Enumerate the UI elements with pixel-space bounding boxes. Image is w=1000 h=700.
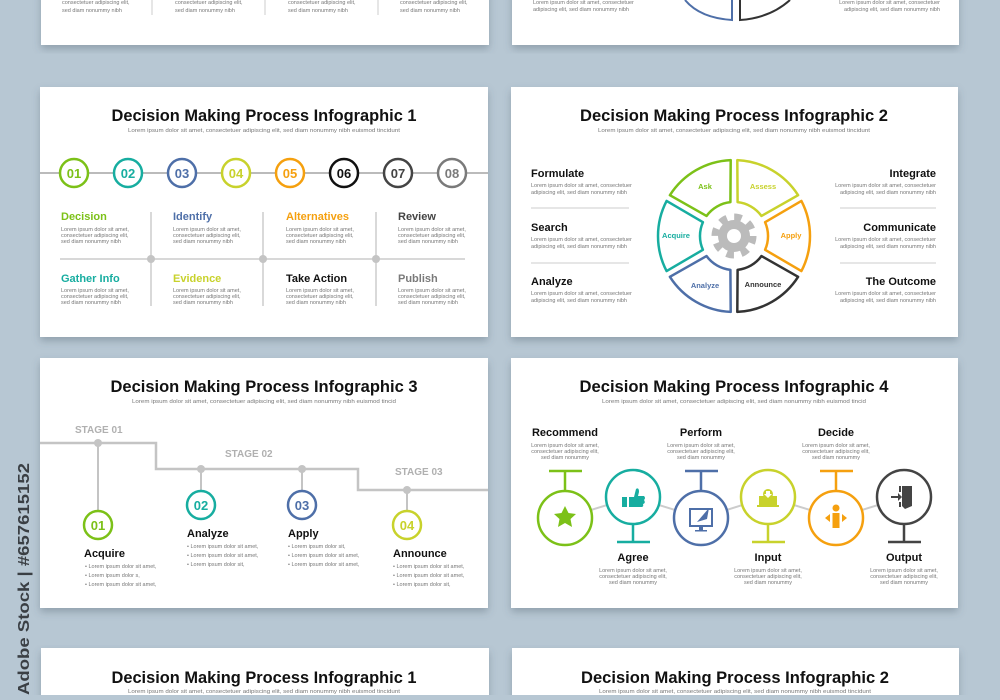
watermark: side credit: Adobe Stock | #657615152 — [16, 463, 33, 695]
card: top-right partial: Lorem ipsum dolor sit amet, consectetuer — [533, 0, 634, 6]
step texts: Recommend — [532, 427, 598, 439]
stage texts: Announce — [393, 548, 447, 560]
left items: Lorem ipsum dolor sit amet, consectetuer — [531, 183, 632, 189]
right items: adipiscing elit, sed diam nonummy nibh — [840, 298, 936, 304]
left items: Analyze — [531, 276, 573, 288]
step texts: Lorem ipsum dolor sit amet, — [286, 227, 354, 233]
stage texts: Acquire — [84, 548, 125, 560]
step texts: consectetuer adipiscing elit, — [802, 449, 870, 455]
step texts: consectetuer adipiscing elit, — [531, 449, 599, 455]
numbered circles: 05 — [283, 166, 297, 181]
step texts: consectetuer adipiscing elit, — [398, 233, 466, 239]
panel: infographic 2: Lorem ipsum dolor sit amet, consectetuer adipiscing elit, sed diam nonummy nibh euismod tincidunt — [598, 128, 871, 134]
step texts: Take Action — [286, 273, 347, 285]
step texts: Lorem ipsum dolor sit amet, — [398, 227, 466, 233]
left items: Search — [531, 222, 568, 234]
step texts: sed diam nonummy nibh — [173, 239, 233, 245]
card: top-left partial: consectetuer adipiscing elit, — [62, 0, 130, 6]
step texts: Perform — [680, 427, 722, 439]
step texts: consectetuer adipiscing elit, — [286, 233, 354, 239]
stage texts: • Lorem ipsum dolor sit amet, — [393, 573, 465, 579]
card: bottom-left partial — [41, 648, 489, 700]
step texts: consectetuer adipiscing elit, — [599, 574, 667, 580]
step texts: Lorem ipsum dolor sit amet, — [286, 288, 354, 294]
step texts: consectetuer adipiscing elit, — [173, 294, 241, 300]
left items — [531, 168, 632, 304]
numbered circles: 07 — [391, 166, 405, 181]
numbered circles: 02 — [121, 166, 135, 181]
step texts: Input — [755, 552, 782, 564]
panel: infographic 3 — [40, 358, 488, 608]
stage texts: • Lorem ipsum dolor sit, — [393, 582, 451, 588]
step texts: Evidence — [173, 273, 221, 285]
step texts: consectetuer adipiscing elit, — [173, 233, 241, 239]
right items: adipiscing elit, sed diam nonummy nibh — [840, 244, 936, 250]
step texts: Lorem ipsum dolor sit amet, — [667, 443, 735, 449]
icon: star — [554, 506, 576, 527]
step texts: sed diam nonummy — [812, 455, 860, 461]
step texts: Gather Info — [61, 273, 120, 285]
card: top-left partial: consectetuer adipiscing elit, — [175, 0, 243, 6]
title 3: Decision Making Process Infographic 3 — [110, 377, 418, 396]
step texts: Lorem ipsum dolor sit amet, — [61, 227, 129, 233]
wheel diagram: Ask — [698, 182, 713, 191]
step texts — [531, 427, 938, 586]
step texts: sed diam nonummy nibh — [286, 239, 346, 245]
step texts: sed diam nonummy — [880, 580, 928, 586]
stage texts: Apply — [288, 528, 319, 540]
wheel diagram: Analyze — [691, 281, 719, 290]
numbered circles: 04 — [229, 166, 244, 181]
step texts: Lorem ipsum dolor sit amet, — [398, 288, 466, 294]
step texts: Decision — [61, 211, 107, 223]
left items: adipiscing elit, sed diam nonummy nibh — [531, 190, 627, 196]
right items: Communicate — [863, 222, 936, 234]
step texts: sed diam nonummy — [677, 455, 725, 461]
panel: infographic 2 — [511, 87, 958, 337]
step texts: Lorem ipsum dolor sit amet, — [802, 443, 870, 449]
stage texts: • Lorem ipsum dolor sit, — [288, 544, 346, 550]
stage texts: • Lorem ipsum dolor sit amet, — [85, 582, 157, 588]
step texts: sed diam nonummy — [744, 580, 792, 586]
step texts: sed diam nonummy nibh — [398, 239, 458, 245]
card: top-right partial: adipiscing elit, sed diam nonummy nibh — [533, 7, 629, 13]
icon: person arrows — [825, 504, 847, 528]
stepped path — [40, 443, 488, 490]
step texts: consectetuer adipiscing elit, — [61, 233, 129, 239]
panel: infographic 1: Lorem ipsum dolor sit amet, consectetuer adipiscing elit, sed diam nonummy nibh euismod tincidunt — [128, 128, 401, 134]
right items: The Outcome — [866, 276, 936, 288]
stage texts: • Lorem ipsum dolor sit amet, — [85, 564, 157, 570]
wheel diagram — [658, 153, 810, 319]
numbered circles — [60, 159, 466, 187]
right items: Lorem ipsum dolor sit amet, consectetuer — [835, 237, 936, 243]
panel: infographic 4: Lorem ipsum dolor sit amet, consectetuer adipiscing elit, sed diam nonummy nibh euismod tincid — [602, 399, 866, 405]
card: bottom-left partial: Lorem ipsum dolor sit amet, consectetuer adipiscing elit, sed diam nonummy nibh euismod tincidunt — [128, 689, 401, 695]
step texts: Lorem ipsum dolor sit amet, — [531, 443, 599, 449]
wheel diagram: Apply — [781, 231, 802, 240]
right items — [835, 168, 936, 304]
icon: gear — [715, 217, 753, 255]
step texts: sed diam nonummy nibh — [61, 300, 121, 306]
stage texts: • Lorem ipsum dolor sit amet, — [187, 553, 259, 559]
left items: Lorem ipsum dolor sit amet, consectetuer — [531, 237, 632, 243]
card: top-left partial: consectetuer adipiscing elit, — [400, 0, 468, 6]
step texts: consectetuer adipiscing elit, — [667, 449, 735, 455]
left items: adipiscing elit, sed diam nonummy nibh — [531, 298, 627, 304]
left items: adipiscing elit, sed diam nonummy nibh — [531, 244, 627, 250]
stage texts: • Lorem ipsum dolor sit amet, — [288, 562, 360, 568]
step texts: Identify — [173, 211, 213, 223]
panel: infographic 4 — [511, 358, 958, 608]
numbered circles: 08 — [445, 166, 459, 181]
step texts: Alternatives — [286, 211, 349, 223]
right items: adipiscing elit, sed diam nonummy nibh — [840, 190, 936, 196]
icon: thumbs up — [622, 488, 645, 507]
stage labels: STAGE 03 — [395, 467, 443, 478]
card: top-left partial: sed diam nonummy nibh — [62, 8, 122, 14]
numbered circles: 01 — [67, 166, 81, 181]
card: top-left partial: sed diam nonummy nibh — [400, 8, 460, 14]
card: top-right partial: Lorem ipsum dolor sit amet, consectetuer — [839, 0, 940, 6]
icon: rocket monitor — [690, 508, 712, 532]
wheel diagram: Announce — [745, 280, 781, 289]
panel: infographic 3: Lorem ipsum dolor sit amet, consectetuer adipiscing elit, sed diam nonummy nibh euismod tincid — [132, 399, 396, 405]
step texts: sed diam nonummy nibh — [173, 300, 233, 306]
step texts: sed diam nonummy nibh — [398, 300, 458, 306]
step texts: consectetuer adipiscing elit, — [398, 294, 466, 300]
stage labels: STAGE 01 — [75, 425, 123, 436]
stage circles: 01 — [91, 518, 105, 533]
step texts: Lorem ipsum dolor sit amet, — [61, 288, 129, 294]
step texts: sed diam nonummy — [541, 455, 589, 461]
step texts: sed diam nonummy — [609, 580, 657, 586]
stage texts: • Lorem ipsum dolor sit amet, — [393, 564, 465, 570]
step texts — [61, 211, 466, 306]
card: top-left partial: consectetuer adipiscing elit, — [288, 0, 356, 6]
title 1: Decision Making Process Infographic 1 — [112, 106, 416, 125]
right items: Lorem ipsum dolor sit amet, consectetuer — [835, 291, 936, 297]
wheel diagram: Acquire — [662, 231, 690, 240]
card: top-left partial — [41, 0, 489, 45]
step texts: consectetuer adipiscing elit, — [870, 574, 938, 580]
step texts: sed diam nonummy nibh — [286, 300, 346, 306]
stage texts: • Lorem ipsum dolor s, — [85, 573, 140, 579]
title 2: Decision Making Process Infographic 2 — [580, 106, 888, 125]
right items: Lorem ipsum dolor sit amet, consectetuer — [835, 183, 936, 189]
step circles with stems — [538, 470, 931, 545]
step texts: Lorem ipsum dolor sit amet, — [599, 568, 667, 574]
stage texts: • Lorem ipsum dolor sit amet, — [288, 553, 360, 559]
card: bottom-right partial: Lorem ipsum dolor sit amet, consectetuer adipiscing elit, sed diam nonummy nibh euismod tincidunt — [599, 689, 872, 695]
left items: Lorem ipsum dolor sit amet, consectetuer — [531, 291, 632, 297]
step texts: Publish — [398, 273, 438, 285]
icon: download tray — [757, 489, 779, 507]
card: top-right partial — [512, 0, 959, 45]
left items: Formulate — [531, 168, 584, 180]
step texts: sed diam nonummy nibh — [61, 239, 121, 245]
step texts: Lorem ipsum dolor sit amet, — [173, 227, 241, 233]
step texts: Agree — [617, 552, 649, 564]
stage circles: 03 — [295, 498, 309, 513]
stage texts: • Lorem ipsum dolor sit amet, — [187, 544, 259, 550]
stage labels: STAGE 02 — [225, 449, 273, 460]
stage circles — [84, 491, 421, 539]
step texts: Output — [886, 552, 922, 564]
stage texts: Analyze — [187, 528, 229, 540]
stage labels — [75, 425, 443, 478]
step texts: Lorem ipsum dolor sit amet, — [173, 288, 241, 294]
panel: infographic 1 — [40, 87, 488, 337]
numbered circles: 06 — [337, 166, 351, 181]
step texts: Lorem ipsum dolor sit amet, — [734, 568, 802, 574]
step texts: consectetuer adipiscing elit, — [734, 574, 802, 580]
step texts: consectetuer adipiscing elit, — [61, 294, 129, 300]
icon: exit door — [891, 486, 912, 509]
connectors — [565, 497, 904, 518]
step texts: Review — [398, 211, 436, 223]
title 4: Decision Making Process Infographic 4 — [580, 377, 889, 396]
stage circles: 02 — [194, 498, 208, 513]
right items: Integrate — [890, 168, 936, 180]
step texts: Decide — [818, 427, 854, 439]
card: top-right partial: adipiscing elit, sed diam nonummy nibh — [844, 7, 940, 13]
card: bottom-right partial: Decision Making Process Infographic 2 — [581, 668, 889, 687]
stage texts: • Lorem ipsum dolor sit, — [187, 562, 245, 568]
card: top-left partial: sed diam nonummy nibh — [288, 8, 348, 14]
card: top-left partial: sed diam nonummy nibh — [175, 8, 235, 14]
step texts: Lorem ipsum dolor sit amet, — [870, 568, 938, 574]
numbered circles: 03 — [175, 166, 189, 181]
wheel diagram: Assess — [750, 182, 776, 191]
stage texts — [84, 528, 465, 588]
stage circles: 04 — [400, 518, 415, 533]
card: bottom-right partial — [512, 648, 959, 700]
card: bottom-left partial: Decision Making Process Infographic 1 — [112, 668, 416, 687]
step texts: consectetuer adipiscing elit, — [286, 294, 354, 300]
